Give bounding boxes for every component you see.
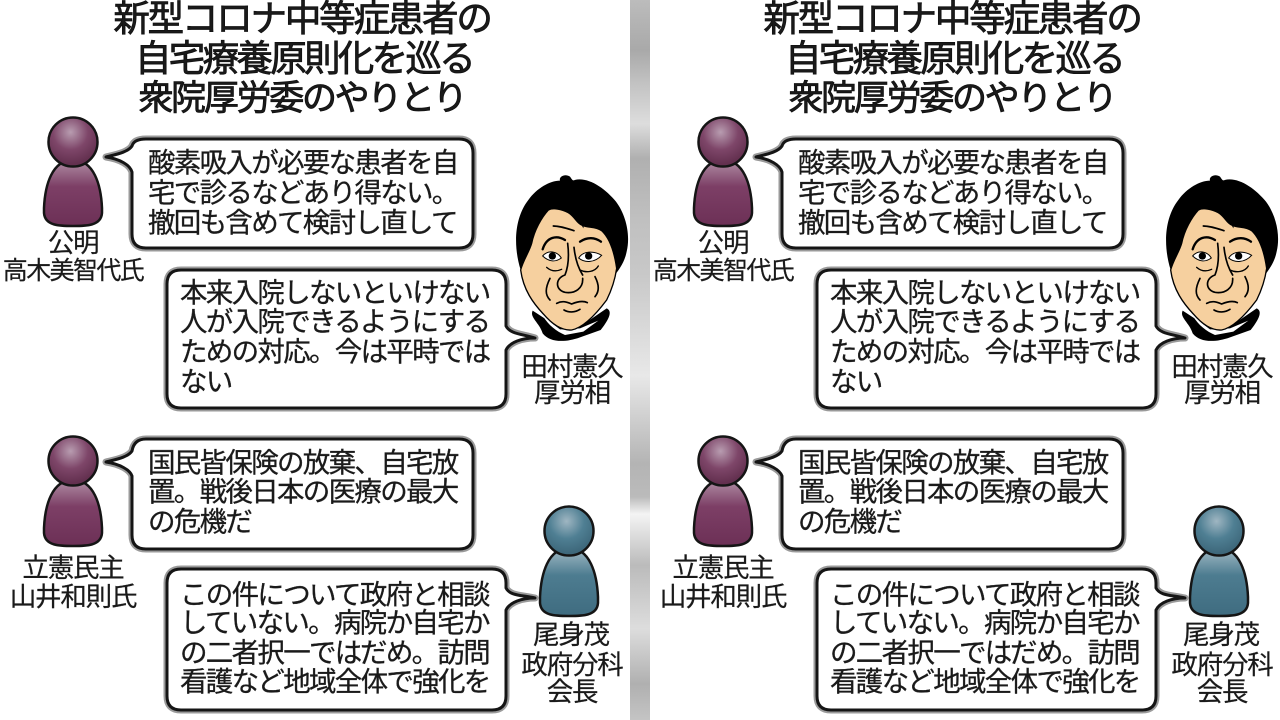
speech bubble: Omi: この件について政府と相談 [180, 579, 490, 610]
speech bubble: Omi (copy): していない。病院か自宅か [830, 607, 1140, 638]
label: Tamura (copy): 田村憲久 [1171, 352, 1273, 382]
label: Tamura: 厚労相 [534, 378, 610, 408]
label: Yamai (copy): 立憲民主 [672, 553, 774, 583]
label: Yamai (copy): 山井和則氏 [660, 582, 787, 612]
title (copy) [763, 0, 1141, 118]
label: Yamai: 立憲民主 [22, 553, 124, 583]
person icon: Takagi [44, 118, 102, 226]
person icon: Takagi (copy) [694, 118, 752, 226]
title [113, 0, 491, 118]
speech bubble: Omi (copy): の二者択一ではだめ。訪問 [830, 637, 1139, 668]
title: 衆院厚労委のやりとり [138, 79, 466, 118]
speech bubble: Tamura: 人が入院できるようにする [180, 306, 489, 337]
label: Omi: 尾身茂 [533, 620, 610, 650]
speech bubble: Tamura (copy): ための対応。今は平時では [830, 336, 1141, 367]
portrait: Tamura [516, 175, 628, 341]
title: 自宅療養原則化を巡る [135, 38, 473, 79]
label: Omi: 会長 [547, 677, 598, 707]
title (copy): 自宅療養原則化を巡る [785, 38, 1123, 79]
speech bubble: Tamura (copy): 本来入院しないといけない [830, 277, 1140, 308]
label: Yamai [10, 553, 137, 612]
speech bubble: Omi [167, 569, 535, 710]
person icon: Yamai (copy) [694, 436, 752, 546]
speech bubble: Omi (copy): この件について政府と相談 [830, 579, 1140, 610]
label: Tamura: 田村憲久 [521, 352, 623, 382]
label: Omi (copy): 会長 [1197, 677, 1248, 707]
speech bubble: Yamai (copy): の危機だ [798, 506, 902, 537]
label: Yamai: 山井和則氏 [10, 582, 137, 612]
label: Takagi [3, 228, 145, 285]
person icon: Omi [540, 506, 598, 616]
speech bubble: Omi (copy) [817, 569, 1185, 710]
speech bubble: Yamai: 国民皆保険の放棄、自宅放 [148, 447, 459, 478]
speech bubble: Yamai (copy) [756, 439, 1123, 549]
label: Takagi (copy): 公明 [698, 228, 748, 258]
label: Omi (copy) [1171, 620, 1273, 707]
speech bubble: Takagi: 酸素吸入が必要な患者を自 [148, 147, 458, 178]
panel: right copy [653, 0, 1278, 710]
label: Takagi (copy): 高木美智代氏 [653, 257, 795, 285]
speech bubble: Takagi (copy): 宅で診るなどあり得ない。 [798, 177, 1108, 208]
speech bubble: Takagi (copy): 撤回も含めて検討し直して [798, 207, 1107, 238]
speech bubble: Tamura: 本来入院しないといけない [180, 277, 490, 308]
label: Tamura (copy) [1171, 352, 1273, 408]
label: Omi [521, 620, 623, 707]
speech bubble: Tamura: ための対応。今は平時では [180, 336, 491, 367]
portrait: Tamura (copy) [1166, 175, 1278, 341]
speech bubble: Takagi: 撤回も含めて検討し直して [148, 207, 457, 238]
panel: left copy [3, 0, 628, 710]
label: Tamura (copy): 厚労相 [1184, 378, 1260, 408]
speech bubble: Takagi (copy) [756, 139, 1123, 248]
label: Tamura [521, 352, 623, 408]
speech bubble: Tamura (copy) [817, 270, 1185, 408]
title (copy): 衆院厚労委のやりとり [788, 79, 1116, 118]
person icon: Omi (copy) [1190, 506, 1248, 616]
label: Omi (copy): 尾身茂 [1183, 620, 1260, 650]
divider band [630, 0, 650, 720]
speech bubble: Tamura (copy): ない [830, 366, 882, 397]
speech bubble: Omi: の二者択一ではだめ。訪問 [180, 637, 489, 668]
speech bubble: Tamura (copy): 人が入院できるようにする [830, 306, 1139, 337]
speech bubble: Yamai (copy): 置。戦後日本の医療の最大 [798, 476, 1109, 507]
speech bubble: Omi: 看護など地域全体で強化を [180, 666, 490, 697]
label: Takagi (copy) [653, 228, 795, 285]
label: Omi: 政府分科 [521, 650, 623, 680]
speech bubble: Omi (copy): 看護など地域全体で強化を [830, 666, 1140, 697]
label: Yamai (copy) [660, 553, 787, 612]
speech bubble: Tamura [167, 270, 535, 408]
speech bubble: Yamai: 置。戦後日本の医療の最大 [148, 476, 459, 507]
speech bubble: Yamai (copy): 国民皆保険の放棄、自宅放 [798, 447, 1109, 478]
speech bubble: Yamai: の危機だ [148, 506, 252, 537]
speech bubble: Tamura: ない [180, 366, 232, 397]
label: Omi (copy): 政府分科 [1171, 650, 1273, 680]
speech bubble: Takagi: 宅で診るなどあり得ない。 [148, 177, 458, 208]
speech bubble: Omi: していない。病院か自宅か [180, 607, 490, 638]
label: Takagi: 公明 [48, 228, 98, 258]
label: Takagi: 高木美智代氏 [3, 257, 145, 285]
speech bubble: Takagi (copy): 酸素吸入が必要な患者を自 [798, 147, 1108, 178]
speech bubble: Yamai [106, 439, 473, 549]
speech bubble: Takagi [106, 139, 473, 248]
person icon: Yamai [44, 436, 102, 546]
